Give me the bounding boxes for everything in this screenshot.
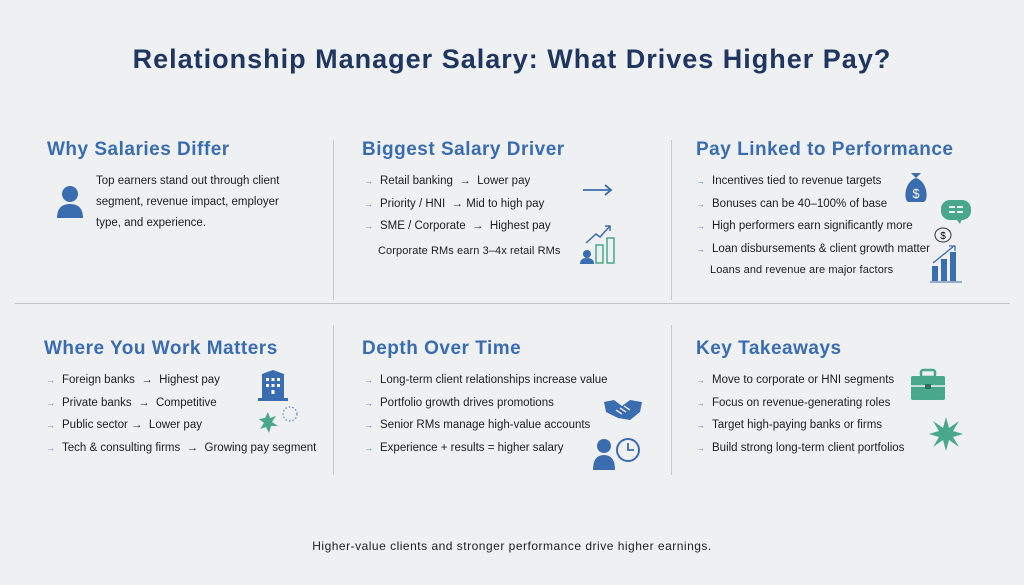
icon: arrow: [583, 184, 612, 196]
list: → High performers earn significantly more: [696, 220, 913, 232]
list: [696, 374, 904, 454]
list: → Loan disbursements & client growth matter: [696, 242, 930, 254]
list: [364, 175, 551, 232]
list: → Focus on revenue-generating roles: [696, 396, 890, 408]
heading: Biggest Salary Driver: [362, 139, 565, 160]
icon: coin: $: [940, 231, 946, 242]
heading: Pay Linked to Performance: [696, 139, 953, 160]
icon: starburst: [929, 417, 963, 451]
list: → Build strong long-term client portfolios: [696, 442, 904, 454]
panel: key takeaways: [696, 338, 963, 454]
panel: biggest salary driver: [362, 139, 615, 264]
icon: stars: [259, 406, 298, 433]
heading: Why Salaries Differ: [47, 139, 230, 160]
text block: Top earners stand out through client segment, revenue impact, employer type, and experience.: [96, 175, 279, 229]
icon: bar chart: [930, 245, 962, 282]
icon: money bag: [905, 173, 927, 202]
icon: coin: [934, 228, 952, 242]
icon: money bag: $: [912, 186, 920, 201]
list: → Foreign banks → Highest pay: [46, 374, 220, 386]
title: Relationship Manager Salary: What Drives Higher Pay?: [133, 44, 891, 74]
list: [46, 374, 316, 454]
panel: why salaries differ: [47, 139, 280, 229]
note: Loans and revenue are major factors: [710, 264, 893, 276]
list: → Long-term client relationships increase value: [364, 374, 608, 386]
list: → Portfolio growth drives promotions: [364, 396, 554, 408]
heading: Where You Work Matters: [44, 338, 278, 359]
panel: depth over time: [362, 338, 642, 470]
icon: growth chart with person: [580, 225, 615, 264]
list: → Tech & consulting firms → Growing pay segment: [46, 442, 316, 454]
heading: Key Takeaways: [696, 338, 842, 359]
list: → Public sector → Lower pay: [46, 419, 202, 431]
list: → Target high-paying banks or firms: [696, 419, 882, 431]
icon: bank building: [258, 370, 288, 401]
panel: pay linked to performance: [696, 139, 971, 282]
icon: person: [57, 186, 83, 218]
footer: Higher-value clients and stronger performance drive higher earnings.: [312, 539, 712, 553]
heading: Depth Over Time: [362, 338, 521, 359]
icon: chat bubble: [941, 200, 971, 224]
list: → SME / Corporate → Highest pay: [364, 220, 551, 232]
icon: handshake: [604, 400, 642, 420]
note: Corporate RMs earn 3–4x retail RMs: [378, 245, 561, 257]
icon: briefcase: [911, 368, 945, 400]
list: → Experience + results = higher salary: [364, 442, 563, 454]
list: [696, 175, 930, 254]
icon: person with clock: [593, 438, 640, 470]
list: → Move to corporate or HNI segments: [696, 374, 894, 386]
list: → Retail banking → Lower pay: [364, 175, 530, 187]
list: → Incentives tied to revenue targets: [696, 175, 881, 187]
list: → Bonuses can be 40–100% of base: [696, 198, 887, 210]
list: [364, 374, 608, 454]
list: → Senior RMs manage high-value accounts: [364, 419, 590, 431]
list: → Private banks → Competitive: [46, 396, 217, 408]
panel: where you work matters: [44, 338, 316, 454]
list: → Priority / HNI → Mid to high pay: [364, 198, 544, 210]
